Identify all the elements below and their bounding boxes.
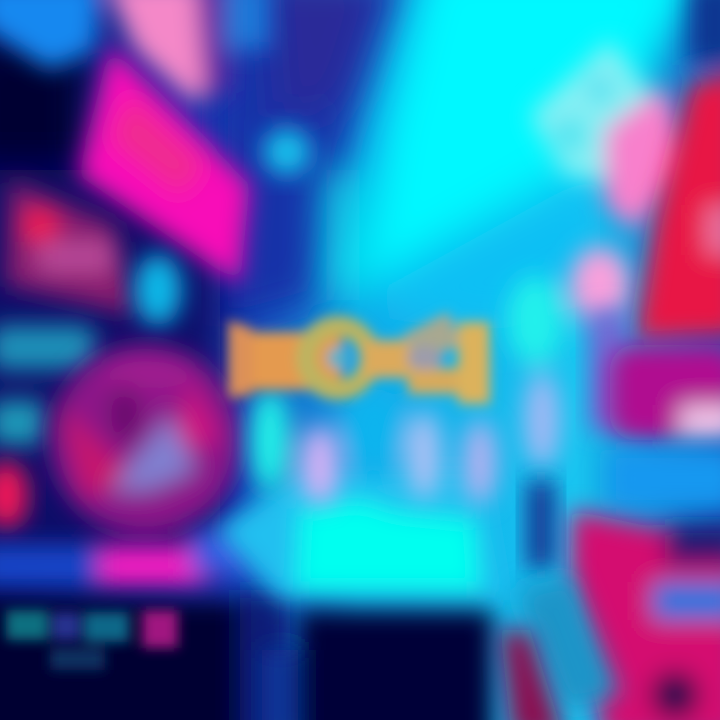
- centre sign light columns: [250, 388, 497, 505]
- right pale pink and cyan sign: [507, 40, 690, 468]
- magenta billboard: [78, 45, 250, 285]
- top-left signs: [0, 0, 270, 105]
- left dark column: [0, 40, 220, 570]
- dark base bottom-left: [0, 590, 290, 720]
- dark red lower edge: [500, 630, 565, 720]
- teal slanted bar: [515, 575, 620, 710]
- right purple column: [590, 310, 626, 430]
- round magenta emblem: [50, 345, 240, 535]
- left teal bars: [0, 325, 95, 445]
- right lower crimson block: [570, 510, 720, 720]
- right magenta sign: [610, 345, 720, 440]
- cyan blob left: [134, 254, 182, 326]
- background: upper dark blue column: [215, 0, 410, 330]
- light spot: [263, 128, 311, 176]
- glowing orange title sign: [228, 312, 490, 404]
- glowing cyan floor: [215, 470, 500, 600]
- dark lower doorway: [262, 610, 493, 720]
- background: cyan light beams: [325, 0, 710, 330]
- right red panel: [635, 0, 720, 340]
- red left blob: [0, 461, 28, 529]
- right blue bars: [608, 450, 720, 508]
- left red sign: [5, 180, 135, 315]
- blue to magenta bar: [0, 530, 250, 587]
- dark strip by door: [527, 480, 555, 570]
- small coloured indicators: [6, 610, 178, 670]
